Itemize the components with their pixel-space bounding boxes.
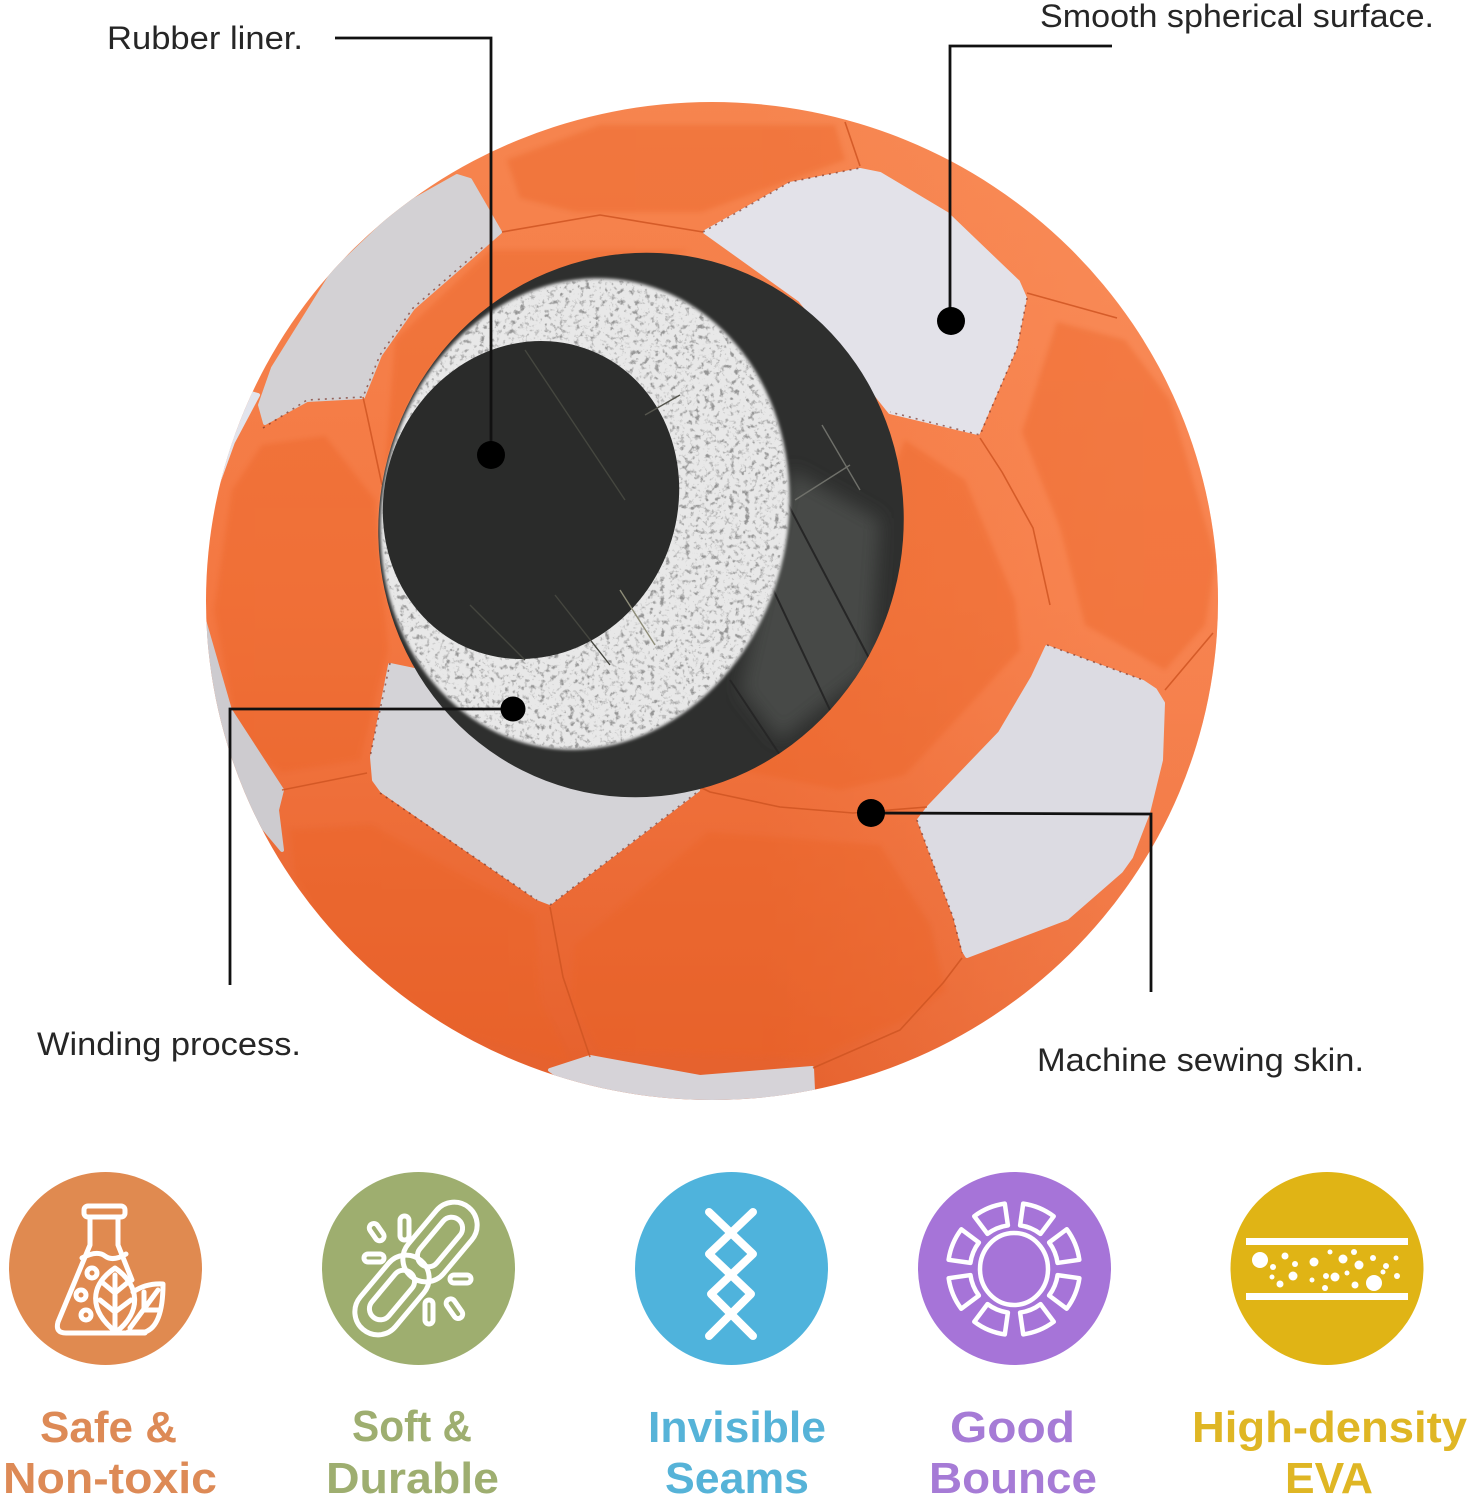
callout: winding process: Winding process. <box>37 1026 301 1062</box>
callout: rubber liner <box>107 20 505 469</box>
inner rubber liner <box>335 296 727 704</box>
label: High-density <box>1192 1403 1468 1452</box>
label <box>1192 1403 1468 1500</box>
cutaway disc: outer rubber layer <box>378 252 904 798</box>
callout: winding process <box>37 696 526 1062</box>
icon: stitch pattern <box>635 1172 828 1365</box>
winding layer <box>378 276 792 752</box>
callout: machine sewing skin: Machine sewing skin. <box>1037 1042 1364 1078</box>
icon: foam layer <box>1230 1172 1424 1365</box>
callout: smooth spherical surface <box>937 0 1434 335</box>
soccer ball <box>200 95 1225 1110</box>
label <box>929 1403 1097 1500</box>
label: Invisible <box>648 1403 826 1452</box>
feature: good bounce <box>918 1172 1111 1500</box>
label <box>648 1403 826 1500</box>
orange panels <box>214 125 1216 1062</box>
label: Soft & <box>352 1402 472 1451</box>
callout: rubber liner: Rubber liner. <box>107 20 303 56</box>
icon: flask with leaves <box>9 1172 202 1365</box>
feature: soft and durable <box>322 1172 515 1500</box>
feature: safe and non-toxic <box>3 1172 217 1500</box>
icon: chain link <box>322 1172 515 1365</box>
white panels <box>204 170 1163 1110</box>
callout: machine sewing skin <box>857 799 1364 1078</box>
ball base <box>200 95 1225 1105</box>
label <box>326 1402 499 1500</box>
label: Good <box>950 1403 1075 1452</box>
label <box>3 1403 217 1500</box>
label: Safe & <box>40 1403 177 1452</box>
feature: invisible seams <box>635 1172 828 1500</box>
panel seams <box>282 122 1213 1068</box>
panel stitching <box>263 168 1143 953</box>
icon: ring of segments <box>918 1172 1111 1365</box>
feature: high-density EVA <box>1192 1172 1468 1500</box>
